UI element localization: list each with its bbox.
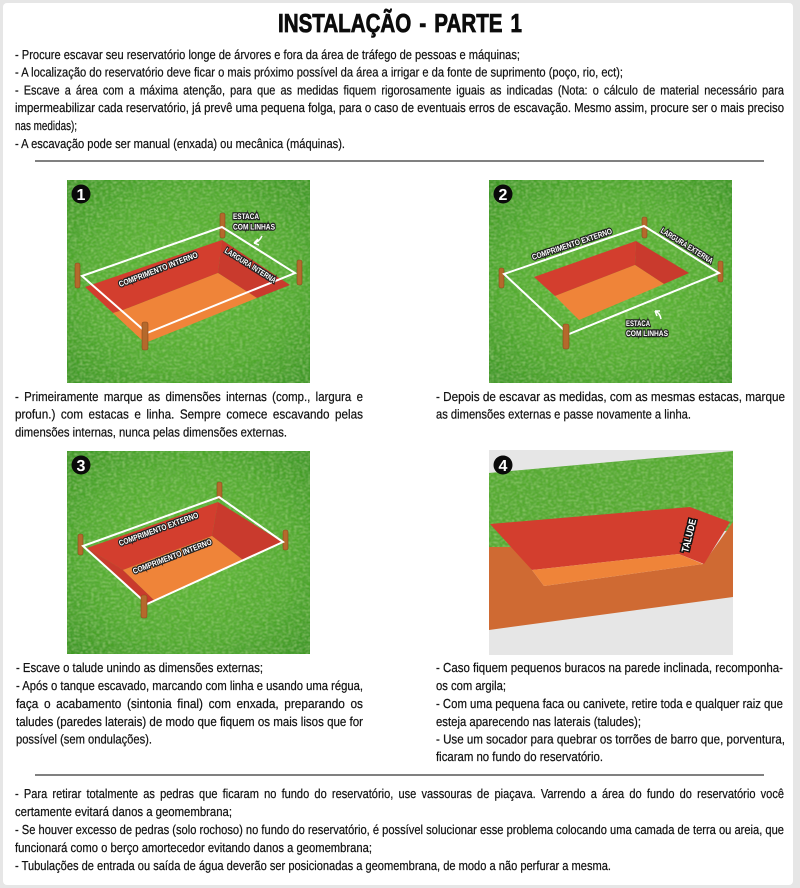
- panel: step 1 illustration: [67, 180, 310, 383]
- step 4 text: ficaram no fundo do reservatório.: [436, 749, 603, 764]
- step 4 text: os com argila;: [436, 678, 506, 693]
- step 3 text: [16, 660, 364, 746]
- step 3 text: - Escave o talude unindo as dimensões externas;: [16, 660, 263, 675]
- talude red walls: [490, 507, 730, 570]
- label: comprimento externo: COMPRIMENTO EXTERNO: [118, 511, 200, 548]
- stakes and lines: [78, 482, 288, 618]
- step 2 text: as dimensões externas e passe novamente a linha.: [436, 406, 691, 422]
- arrow: [254, 236, 262, 245]
- label: talude: TALUDE: [680, 518, 699, 554]
- stakes and lines: [499, 217, 723, 349]
- excavation floor: [123, 536, 243, 601]
- label: estaca com linhas: ESTACA: [626, 319, 650, 328]
- badge 4: 4: [499, 458, 508, 475]
- intro text block: [15, 47, 785, 151]
- intro text block: - A escavação pode ser manual (enxada) ou mecânica (máquinas).: [15, 136, 345, 151]
- label: estaca com linhas: COM LINHAS: [626, 329, 669, 338]
- closing text block: [15, 786, 784, 873]
- step 2 text: [436, 389, 785, 422]
- badge 2: 2: [499, 187, 508, 204]
- badge 4: [494, 456, 512, 475]
- intro text block: - Procure escavar seu reservatório longe de árvores e fora da área de tráfego de pessoas e máquinas;: [15, 47, 520, 62]
- arrow: [655, 311, 661, 319]
- panel: step 4 illustration: [489, 450, 733, 655]
- step 1 text: profun.) com estacas e linha. Sempre comece escavando pelas: [15, 406, 363, 422]
- label: largura externa: LARGURA EXTERNA: [659, 226, 715, 266]
- badge 1: 1: [77, 187, 86, 204]
- label: estaca com linhas: ESTACA: [233, 212, 259, 221]
- label: largura interna: LARGURA INTERNA: [223, 246, 278, 285]
- excavation walls: [87, 502, 282, 604]
- badge 3: [72, 456, 90, 475]
- step 3 text: taludes (paredes laterais) de modo que fiquem os mais lisos que for: [16, 714, 364, 729]
- excavation walls: [534, 241, 689, 296]
- stakes and lines: [75, 213, 302, 350]
- label: estaca com linhas: [626, 319, 669, 338]
- title: INSTALAÇÃO - PARTE 1: [278, 8, 522, 38]
- closing text block: - Tubulações de entrada ou saída de água deverão ser posicionadas a geomembrana, de modo a não perfurar a mesma.: [15, 858, 611, 873]
- badge 2: [494, 184, 512, 204]
- badge 1: [72, 184, 90, 204]
- step 1 text: - Primeiramente marque as dimensões internas (comp., largura e: [15, 389, 363, 404]
- step 1 text: [15, 389, 363, 440]
- panel: step 2 illustration: [489, 180, 732, 383]
- soil: [489, 522, 733, 630]
- label: comprimento interno: COMPRIMENTO INTERNO: [117, 250, 199, 289]
- intro text block: nas medidas);: [15, 118, 77, 133]
- label: estaca com linhas: [233, 212, 276, 232]
- step 4 text: [436, 660, 785, 764]
- floor: [532, 554, 703, 586]
- grass: [489, 451, 733, 547]
- step 1 text: dimensões internas, nunca pelas dimensões externas.: [15, 424, 287, 440]
- label: comprimento interno: COMPRIMENTO INTERNO: [131, 537, 213, 576]
- step 4 text: esteja aparecendo nas laterais (taludes);: [436, 714, 641, 729]
- label: estaca com linhas: COM LINHAS: [233, 222, 276, 232]
- step 3 text: possível (sem ondulações).: [16, 732, 152, 746]
- panel: step 3 illustration: [67, 451, 310, 654]
- intro text block: - A localização do reservatório deve ficar o mais próximo possível da área a irrigar e da fonte de suprimento (poço, rio, ect);: [15, 64, 623, 80]
- excavation floor: [113, 273, 257, 343]
- excavation walls: [85, 240, 290, 313]
- excavation floor: [555, 265, 664, 320]
- closing text block: funcionará como o berço amortecedor evitando danos a geomembrana;: [15, 840, 372, 855]
- step 3 text: faça o acabamento (sintonia final) com enxada, preparando os: [16, 696, 363, 711]
- badge 3: 3: [77, 458, 86, 475]
- closing text block: certamente evitará danos a geomembrana;: [15, 804, 232, 819]
- label: comprimento externo: COMPRIMENTO EXTERNO: [531, 227, 613, 262]
- step 3 text: - Após o tanque escavado, marcando com linha e usando uma régua,: [16, 678, 363, 693]
